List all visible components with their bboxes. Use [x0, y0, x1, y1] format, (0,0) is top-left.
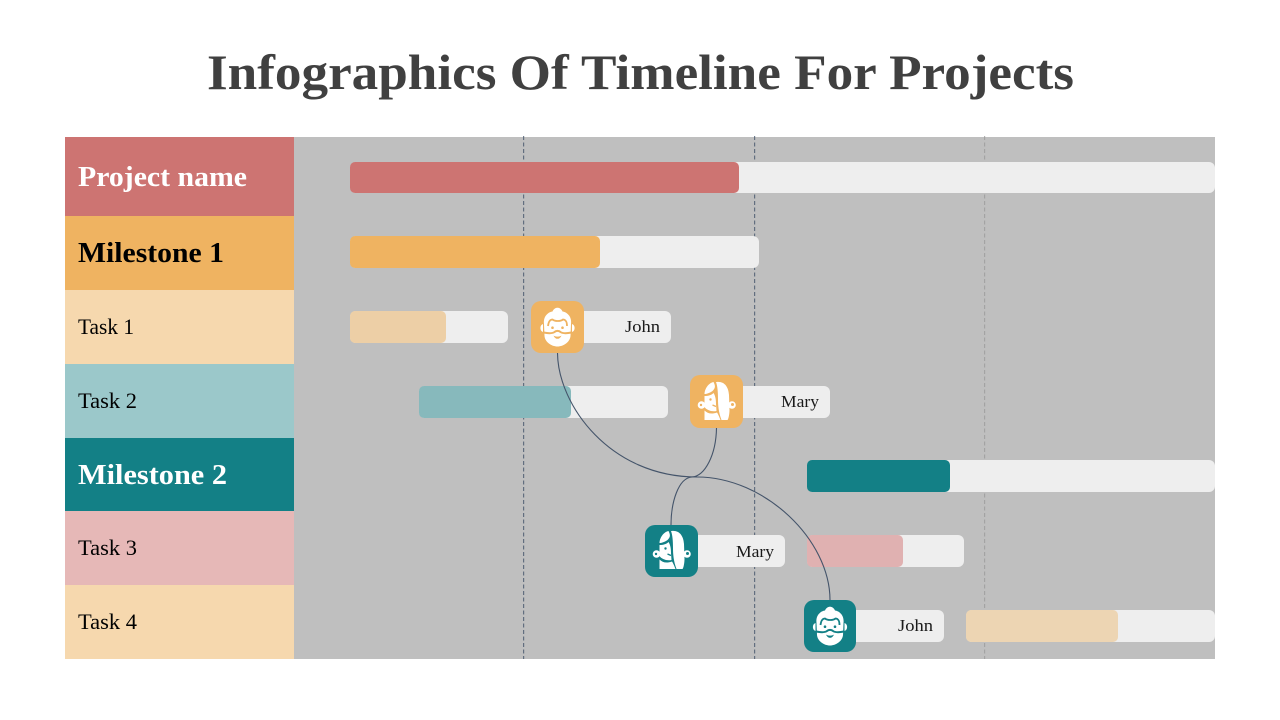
bar: Task 3: [807, 535, 964, 567]
row label: Project name: [65, 137, 294, 216]
row label: Task 4: [65, 585, 294, 659]
name tag: John, Task 4: [804, 600, 944, 652]
row label: Task 2: Task 2: [78, 388, 137, 413]
row label: Task 3: [65, 511, 294, 585]
row label: Milestone 1: [65, 216, 294, 290]
row label: Milestone 2: [65, 438, 294, 511]
bar: Project name: [350, 162, 1215, 193]
row label: Task 4: Task 4: [78, 609, 137, 634]
bar: Task 2: [419, 386, 668, 418]
icon: woman on teal: [645, 525, 698, 577]
name tag: John, Task 4: John: [898, 616, 934, 635]
name tag: John, Task 1: John: [625, 317, 661, 336]
icon: man on orange: [531, 301, 584, 353]
bar: Milestone 2: [807, 460, 1215, 492]
connector: John to John: [558, 353, 830, 600]
bar: Task 4: [966, 610, 1215, 642]
name tag: Mary, Task 3: Mary: [736, 542, 775, 561]
panel: timeline background: [294, 137, 1215, 659]
row label: Project name: Project name: [78, 161, 247, 193]
connector: Mary to Mary: [671, 428, 716, 525]
row label: Task 1: [65, 290, 294, 364]
title: Infographics Of Timeline For Projects: [207, 44, 1074, 100]
name tag: Mary, Task 3: [645, 525, 785, 577]
bar: Milestone 1: [350, 236, 759, 268]
row label: Task 3: Task 3: [78, 535, 137, 560]
row label: Milestone 2: Milestone 2: [78, 459, 227, 491]
name tag: John, Task 1: [531, 301, 671, 353]
name tag: Mary, Task 2: [690, 375, 830, 428]
icon: man on teal: [804, 600, 856, 652]
row label: Milestone 1: Milestone 1: [78, 237, 224, 269]
icon: woman on orange: [690, 375, 743, 428]
row label: Task 1: Task 1: [78, 314, 134, 339]
panel: row labels: [65, 137, 294, 659]
bar: Task 1: [350, 311, 508, 343]
name tag: Mary, Task 2: Mary: [781, 392, 820, 411]
row label: Task 2: [65, 364, 294, 438]
